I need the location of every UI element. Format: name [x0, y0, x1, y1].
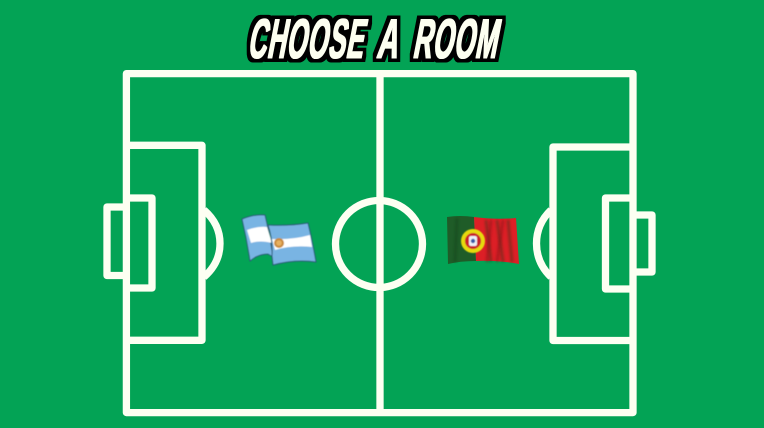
right penalty box	[553, 147, 633, 340]
right six-yard box	[606, 198, 633, 289]
icon: Argentina flag	[242, 215, 316, 265]
title: CHOOSE	[245, 7, 373, 70]
left six-yard box	[126, 198, 152, 288]
left goal	[107, 207, 126, 276]
title: A	[374, 7, 408, 70]
left penalty arc	[204, 210, 220, 277]
right penalty arc	[536, 210, 551, 277]
right goal	[633, 215, 652, 272]
infographic canvas: ROOM	[410, 7, 507, 70]
soccer pitch markings	[107, 74, 652, 413]
centre circle	[336, 200, 422, 288]
icon: Portugal flag	[447, 216, 519, 264]
left penalty box	[126, 145, 202, 340]
pitch outline	[126, 74, 633, 413]
halfway line	[376, 74, 384, 413]
